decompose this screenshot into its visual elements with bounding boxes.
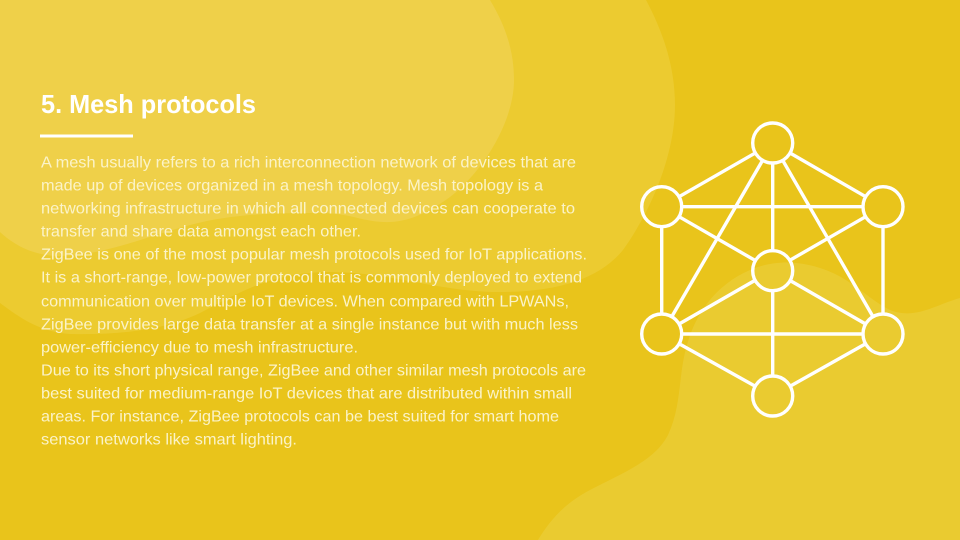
body text: sensor networks like smart lighting. — [41, 432, 297, 448]
body text: best suited for medium-range IoT devices that are distributed within small — [41, 386, 572, 402]
icon: mesh network — [642, 123, 903, 416]
body text: made up of devices organized in a mesh topology. Mesh topology is a — [41, 178, 543, 194]
body text: networking infrastructure in which all connected devices can cooperate to — [41, 200, 575, 218]
network nodes — [642, 123, 903, 416]
body text: Due to its short physical range, ZigBee and other similar mesh protocols are — [41, 362, 586, 380]
title underline — [40, 134, 133, 138]
title: 5. Mesh protocols — [41, 89, 256, 119]
body text: communication over multiple IoT devices. When compared with LPWANs, — [41, 294, 569, 310]
body text: ZigBee is one of the most popular mesh protocols used for IoT applications. — [41, 246, 587, 264]
body text: A mesh usually refers to a rich interconnection network of devices that are — [41, 154, 576, 172]
body text: It is a short-range, low-power protocol that is commonly deployed to extend — [41, 270, 582, 286]
connecting lines — [662, 143, 883, 396]
body text — [41, 154, 587, 448]
body text: power-efficiency due to mesh infrastructure. — [41, 340, 358, 356]
body text: ZigBee provides large data transfer at a single instance but with much less — [41, 316, 578, 334]
body text: transfer and share data amongst each other. — [41, 224, 361, 240]
body text: areas. For instance, ZigBee protocols can be best suited for smart home — [41, 408, 559, 426]
